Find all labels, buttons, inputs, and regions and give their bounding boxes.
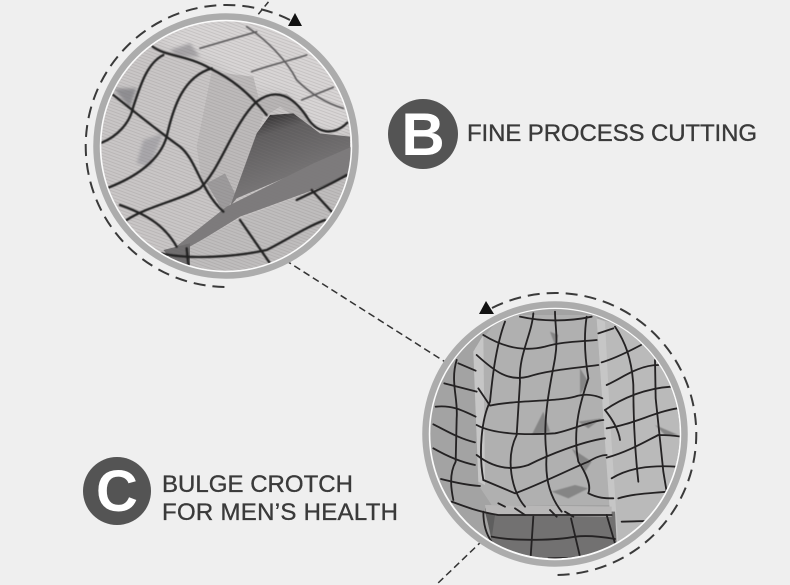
circle C: crotch detail (425, 293, 696, 585)
badge C: C (96, 459, 138, 524)
outer ring (96, 16, 356, 276)
heading: bulge crotch for men's health: BULGE CROTCH (162, 471, 353, 498)
dashed arc with arrow (86, 5, 302, 287)
heading: bulge crotch for men's health: FOR MEN’S HEALTH (162, 499, 398, 526)
fabric photo (430, 309, 680, 558)
connector line top (252, 0, 270, 22)
outer ring (426, 304, 684, 564)
fabric photo (97, 17, 357, 277)
dashed arc with arrow (479, 293, 696, 575)
badge C (83, 457, 151, 525)
heading: bulge crotch for men's health (162, 471, 398, 526)
badge B (388, 99, 458, 169)
connector line to lower circle (285, 260, 450, 365)
connector line left (436, 540, 483, 585)
circle B: fabric detail (86, 0, 450, 365)
heading: fine process cutting: FINE PROCESS CUTTING (467, 120, 757, 147)
badge B: B (401, 101, 445, 168)
grid lines (102, 47, 347, 265)
grid lines (433, 312, 681, 558)
